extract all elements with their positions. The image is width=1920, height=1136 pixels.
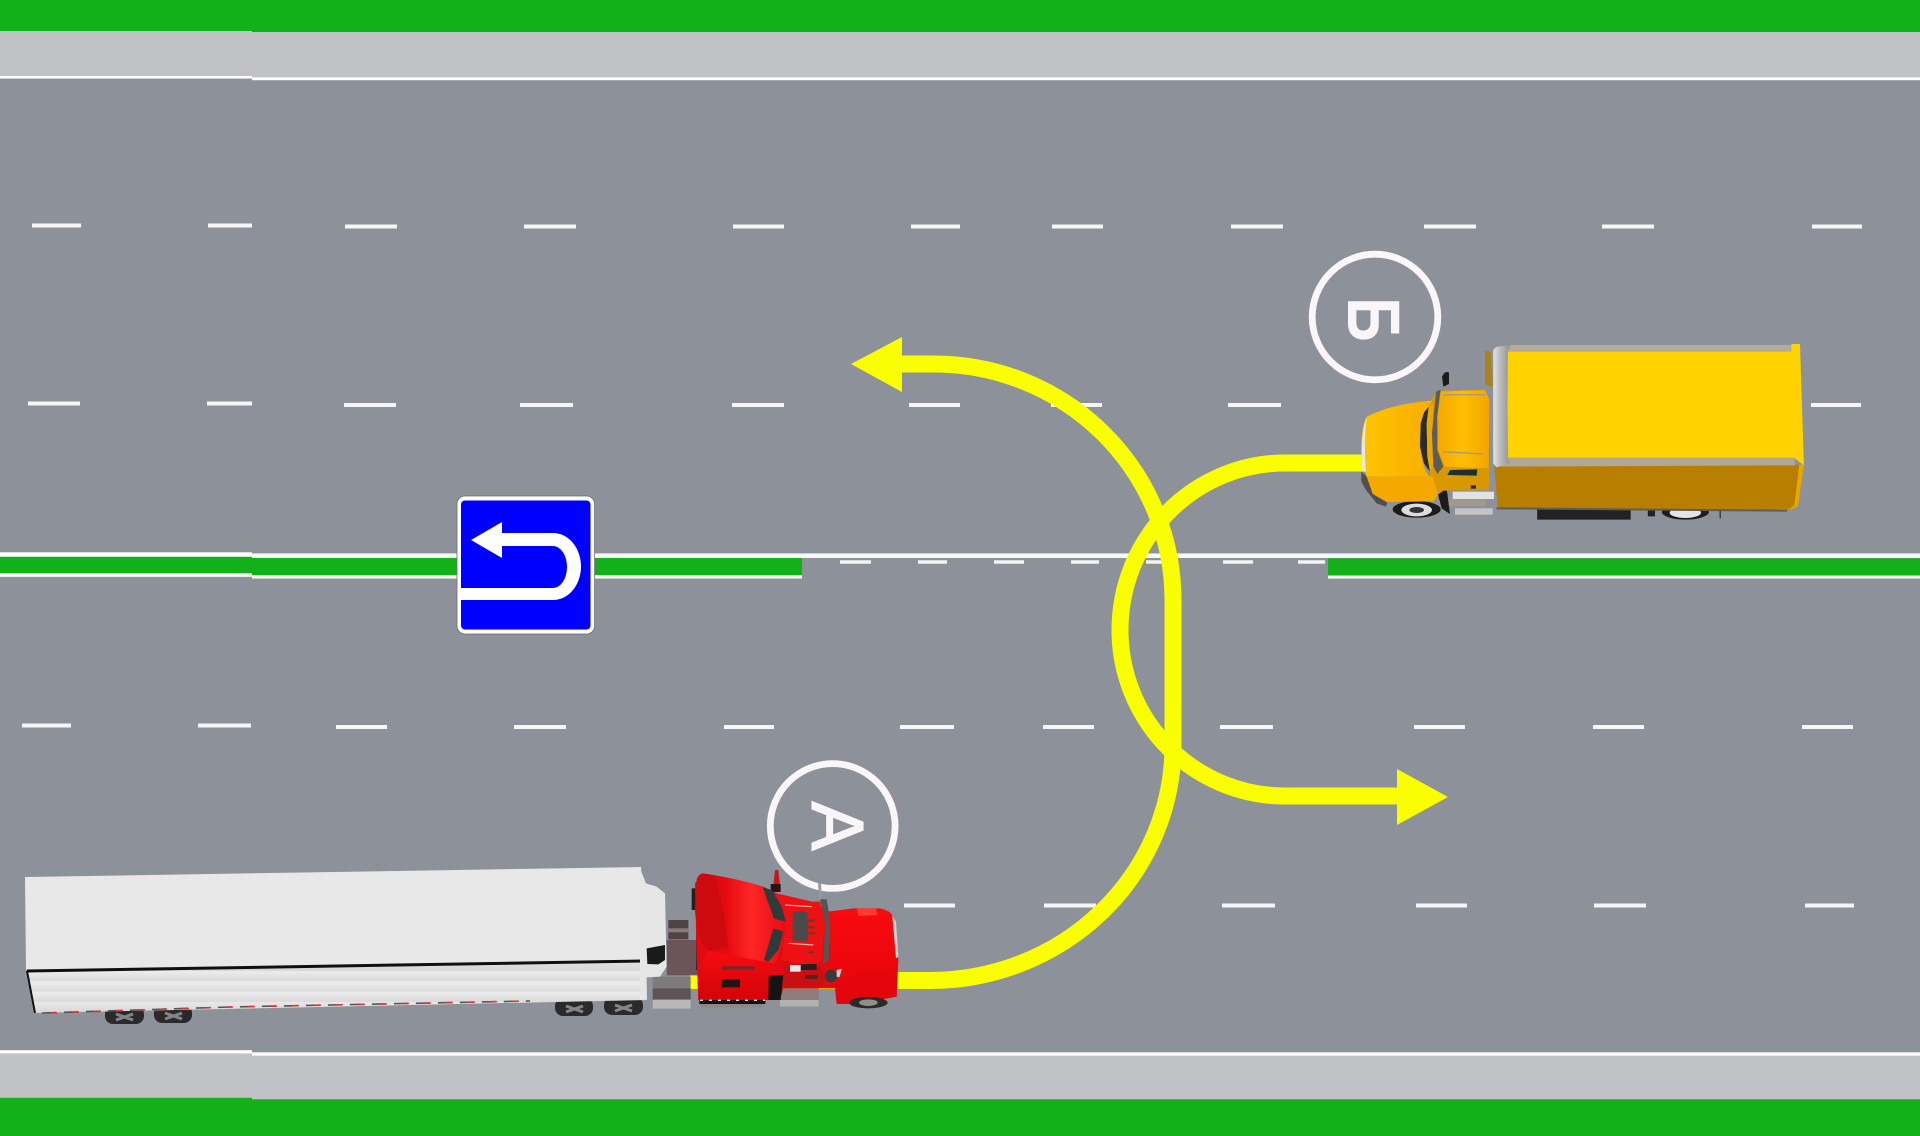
grille edge bbox=[892, 916, 898, 958]
sleeper roof bbox=[695, 873, 785, 964]
sleeper shading arc bbox=[695, 873, 728, 951]
mirror bbox=[825, 969, 842, 982]
exhaust bbox=[1485, 350, 1493, 387]
underbody: tank, rear wheel bbox=[1537, 504, 1721, 520]
windshield rubber bbox=[1420, 407, 1430, 472]
vehicle label circle B bbox=[1312, 254, 1438, 380]
sign: U-turn ahead bbox=[457, 496, 595, 634]
box roof bbox=[1496, 344, 1804, 467]
arrowhead: vehicle B bbox=[1397, 769, 1448, 825]
top verge and shoulder bbox=[0, 0, 1920, 80]
exhaust stack bbox=[771, 870, 822, 900]
trailer side wall bbox=[27, 961, 647, 1013]
sleeper details bbox=[699, 966, 783, 1007]
hood top bbox=[828, 908, 898, 975]
side mirror bbox=[1442, 372, 1449, 387]
front wheel bbox=[849, 997, 888, 1008]
trajectory: vehicle A U-turn bbox=[690, 364, 1173, 980]
median strip with gap bbox=[0, 552, 1920, 579]
fifth wheel and frame bbox=[653, 920, 697, 1009]
rear dark parts bbox=[692, 888, 709, 970]
sleeper side bbox=[697, 951, 777, 1000]
vehicle label circle B: Б bbox=[1332, 297, 1414, 342]
bottom verge and shoulder bbox=[0, 1050, 1920, 1136]
cab group bbox=[1361, 372, 1494, 518]
windshield band lower bbox=[764, 928, 783, 962]
windshield band upper bbox=[763, 887, 786, 922]
arrowhead: vehicle A bbox=[851, 337, 902, 392]
vehicle label circle A bbox=[770, 764, 895, 888]
cab roof bbox=[1437, 390, 1489, 468]
box front column bbox=[1493, 345, 1510, 467]
red cab group bbox=[692, 870, 898, 1008]
lane dashes bbox=[22, 226, 1862, 906]
sunroof and lights bbox=[785, 905, 818, 952]
hood lower panel bbox=[1367, 477, 1438, 502]
trailer front cap bbox=[640, 868, 667, 1000]
roof rails bbox=[1443, 395, 1485, 454]
grey pillar bbox=[820, 899, 831, 964]
cab side and window bbox=[1442, 468, 1489, 491]
grille edge bbox=[1362, 417, 1367, 472]
windshield trim bbox=[1427, 403, 1433, 472]
rear step bbox=[780, 988, 819, 1007]
vehicle label circle A: A bbox=[796, 802, 877, 851]
yellow box truck (vehicle B) bbox=[1361, 344, 1804, 520]
trajectory: vehicle B U-turn bbox=[1120, 463, 1400, 796]
trailer roof bbox=[25, 867, 646, 970]
box side wall bbox=[1494, 465, 1804, 511]
cab side and door bbox=[783, 963, 825, 988]
fender bbox=[835, 968, 897, 1004]
hood air intake bbox=[857, 908, 877, 916]
hood bbox=[1361, 401, 1433, 477]
steps bbox=[1437, 488, 1494, 515]
cab roof bbox=[775, 893, 825, 967]
cab silhouette bbox=[695, 873, 898, 1004]
trailer edge line bbox=[27, 961, 646, 971]
cab pillar bbox=[1432, 389, 1443, 474]
trailer wheels bbox=[105, 997, 643, 1024]
front wheel bbox=[1393, 501, 1441, 518]
red semi truck with white trailer (vehicle A) bbox=[25, 867, 898, 1024]
bumper shadow bbox=[1361, 472, 1387, 507]
cab silhouette bbox=[1430, 390, 1489, 495]
